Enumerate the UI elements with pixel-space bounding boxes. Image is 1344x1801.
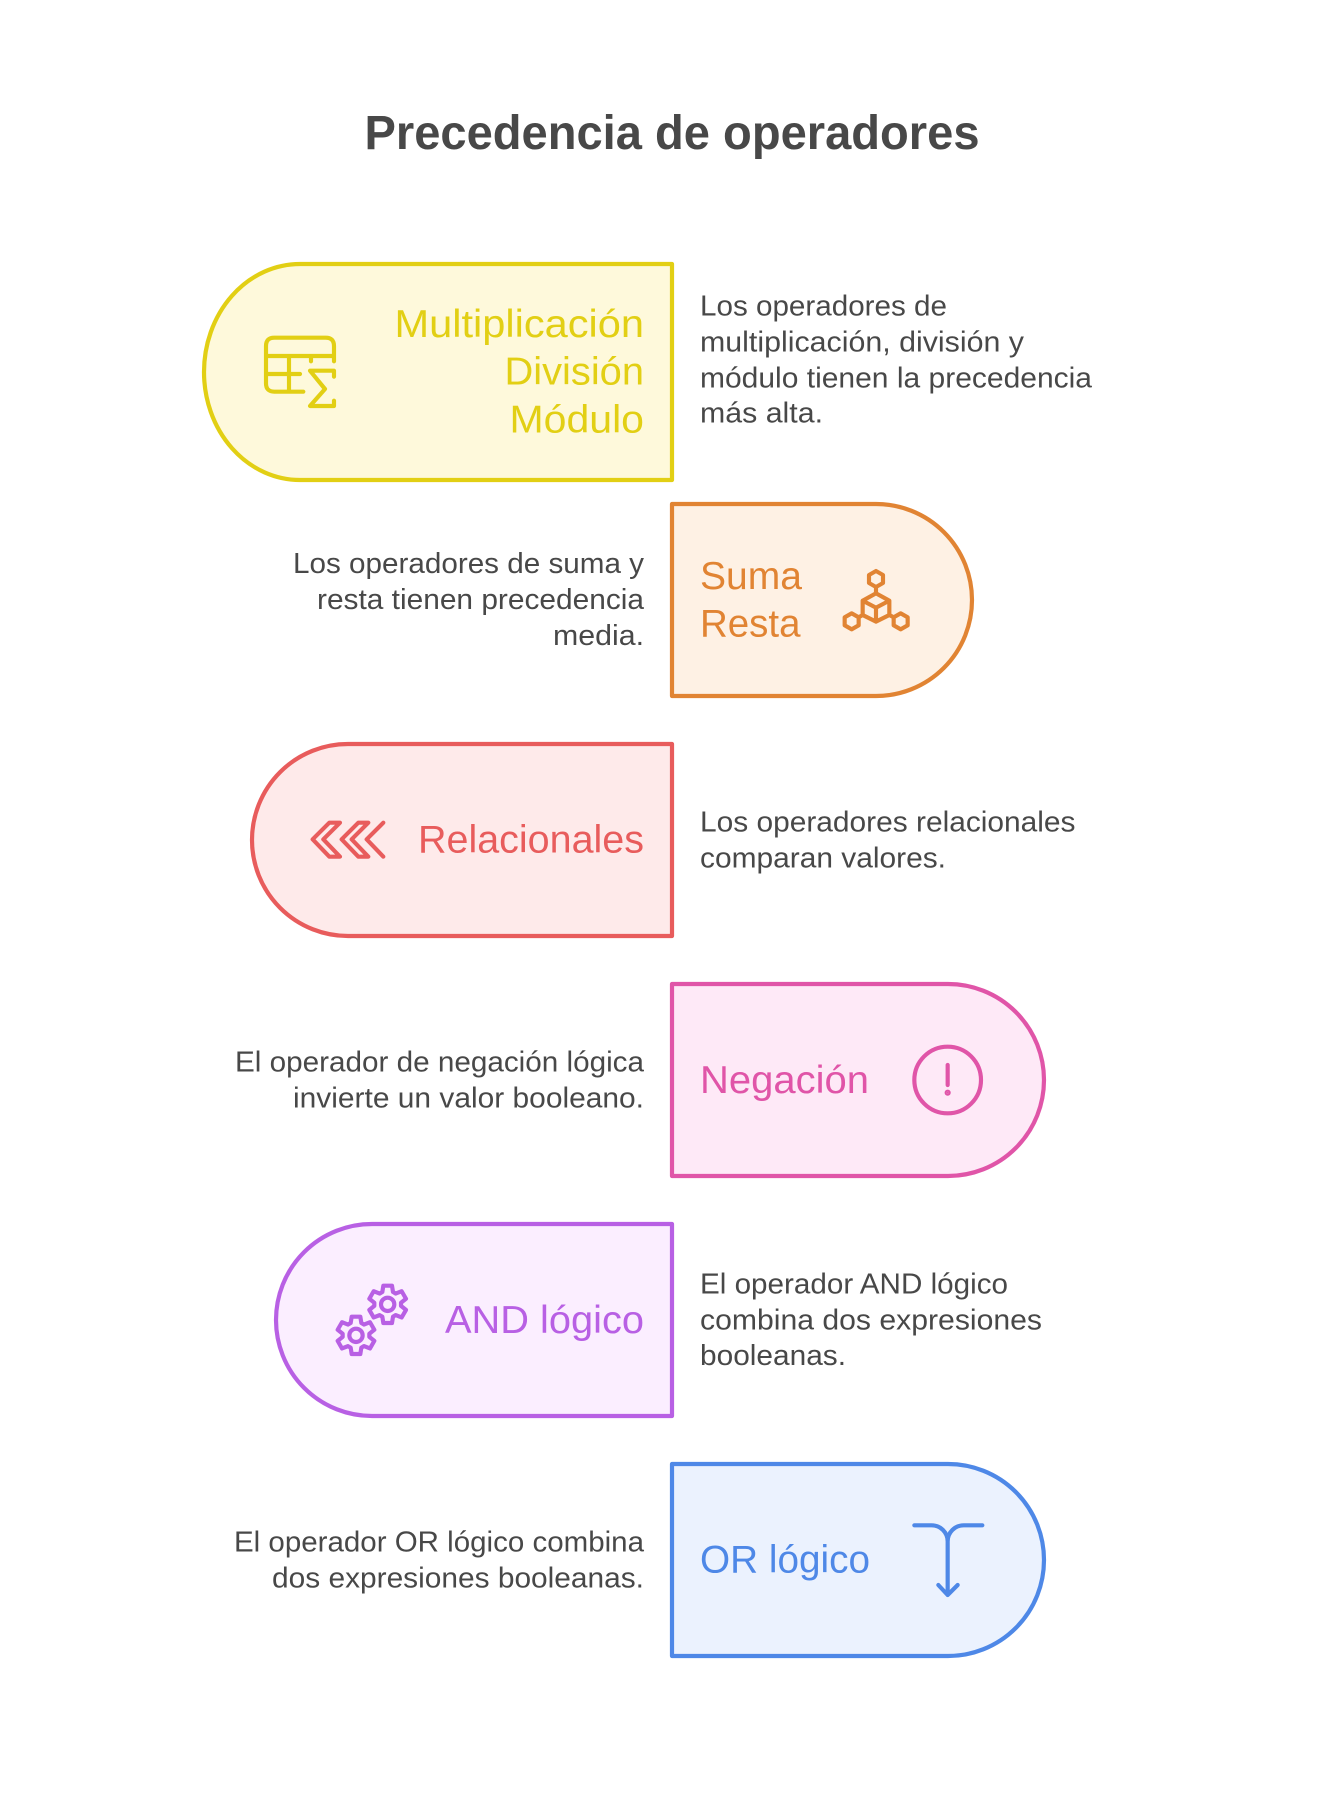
- icon: chevrons: [313, 823, 383, 857]
- label: Suma: [700, 555, 802, 598]
- description: or lógico: dos expresiones booleanas.: [272, 1562, 644, 1594]
- description: multiplicación: [700, 290, 1093, 430]
- panel: and lógico: [276, 1224, 672, 1416]
- description: multiplicación: módulo tienen la precedencia: [700, 362, 1093, 394]
- panel shape: [204, 264, 672, 480]
- label: Multiplicación: [394, 303, 644, 346]
- description: suma y resta: [293, 548, 645, 652]
- description: negación: El operador de negación lógica: [235, 1046, 645, 1078]
- panel shape: [672, 984, 1044, 1176]
- panel shape: [672, 1464, 1044, 1656]
- icon: exclamation circle: [914, 1047, 981, 1113]
- description: relacionales: comparan valores.: [700, 842, 946, 874]
- icon: merging arrow: [914, 1525, 982, 1595]
- description: negación: invierte un valor booleano.: [293, 1082, 644, 1114]
- label: Negación: [700, 1059, 869, 1102]
- label: OR lógico: [700, 1538, 870, 1582]
- description: multiplicación: multiplicación, división y: [700, 326, 1025, 358]
- description: and lógico: El operador AND lógico: [700, 1268, 1008, 1300]
- description: suma y resta: resta tienen precedencia: [317, 584, 645, 616]
- description: relacionales: Los operadores relacionales: [700, 806, 1076, 838]
- icon: table with sigma: [266, 338, 334, 406]
- label: AND lógico: [445, 1299, 644, 1342]
- title: Precedencia de operadores: [364, 107, 980, 160]
- description: relacionales: [700, 806, 1076, 874]
- label: Relacionales: [418, 818, 644, 862]
- label: Módulo: [510, 398, 644, 442]
- description: or lógico: El operador OR lógico combina: [234, 1526, 645, 1558]
- label: [700, 555, 802, 646]
- label: División: [504, 350, 644, 394]
- label: Resta: [700, 602, 801, 646]
- label: [394, 303, 644, 442]
- description: multiplicación: más alta.: [700, 398, 823, 430]
- description: and lógico: [700, 1268, 1042, 1372]
- panel: or lógico: [672, 1464, 1044, 1656]
- description: and lógico: combina dos expresiones: [700, 1304, 1042, 1336]
- panel shape: [672, 504, 972, 696]
- panel: relacionales: [252, 744, 672, 936]
- panel: multiplicación: [204, 264, 672, 480]
- panel shape: [252, 744, 672, 936]
- panel: suma y resta: [672, 504, 972, 696]
- description: negación: [235, 1046, 645, 1114]
- description: multiplicación: Los operadores de: [700, 290, 947, 322]
- description: suma y resta: Los operadores de suma y: [293, 548, 645, 580]
- description: and lógico: booleanas.: [700, 1340, 846, 1372]
- icon: gears: [338, 1286, 406, 1354]
- description: suma y resta: media.: [553, 620, 644, 652]
- icon: cube network: [845, 571, 908, 629]
- panel shape: [276, 1224, 672, 1416]
- description: or lógico: [234, 1526, 645, 1594]
- panel: negación: [672, 984, 1044, 1176]
